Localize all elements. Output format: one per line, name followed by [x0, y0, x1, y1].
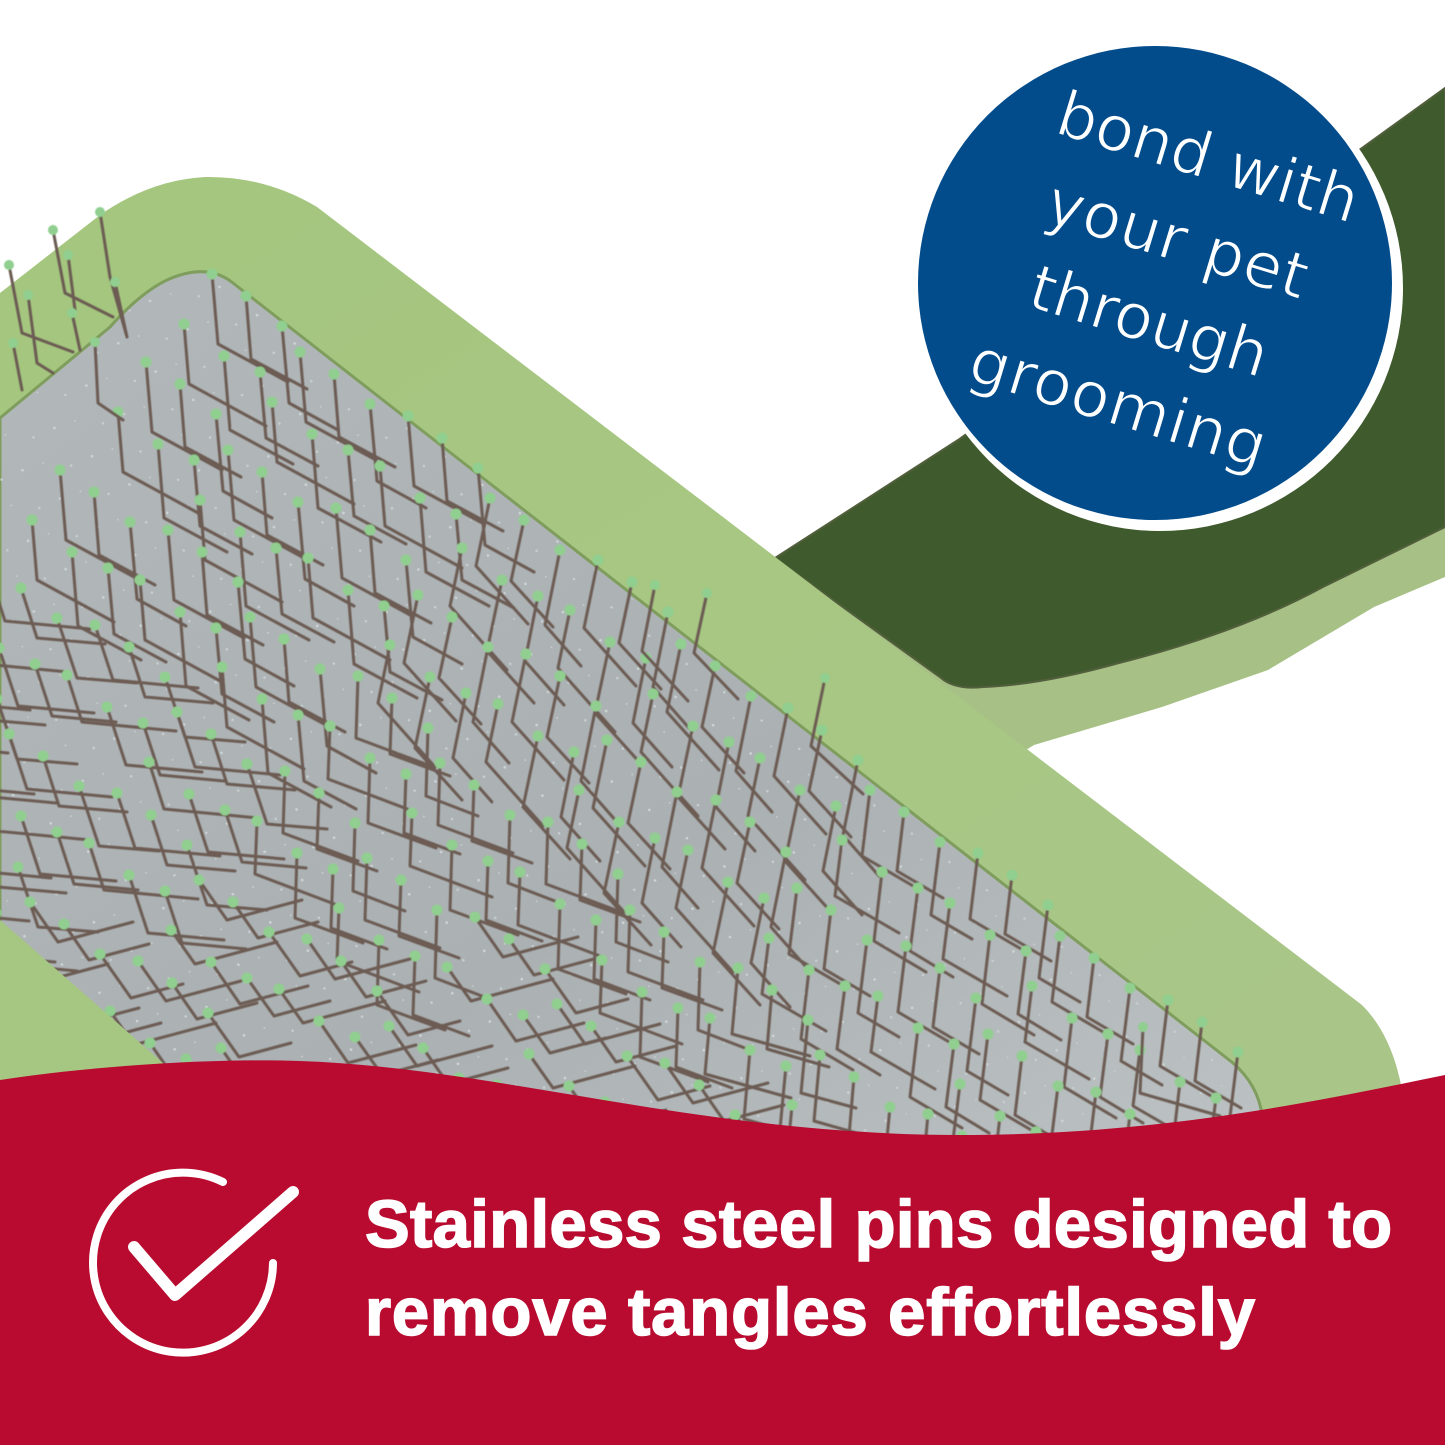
handle dark grip: [775, 88, 1445, 688]
callout text: grooming: [961, 324, 1276, 483]
callout badge: [917, 45, 1403, 531]
headline text: Stainless steel pins designed to: [365, 1187, 1392, 1262]
callout text: bond with: [1048, 77, 1368, 238]
brush head rim: [0, 177, 1402, 1145]
callout text: [961, 77, 1368, 483]
headline text: remove tangles effortlessly: [365, 1275, 1255, 1350]
pad dust specks: [0, 275, 1258, 1145]
callout text: through: [1021, 251, 1278, 392]
icon: check mark in circle: [93, 1173, 293, 1353]
headline text: [365, 1187, 1392, 1350]
callout text: your pet: [1038, 165, 1317, 314]
red wave banner: [0, 1060, 1445, 1445]
brush rim lower-left corner: [0, 920, 175, 1110]
brush pin pad: [0, 272, 1262, 1145]
brush handle: [775, 88, 1445, 790]
stainless steel pins: [0, 212, 1270, 1327]
